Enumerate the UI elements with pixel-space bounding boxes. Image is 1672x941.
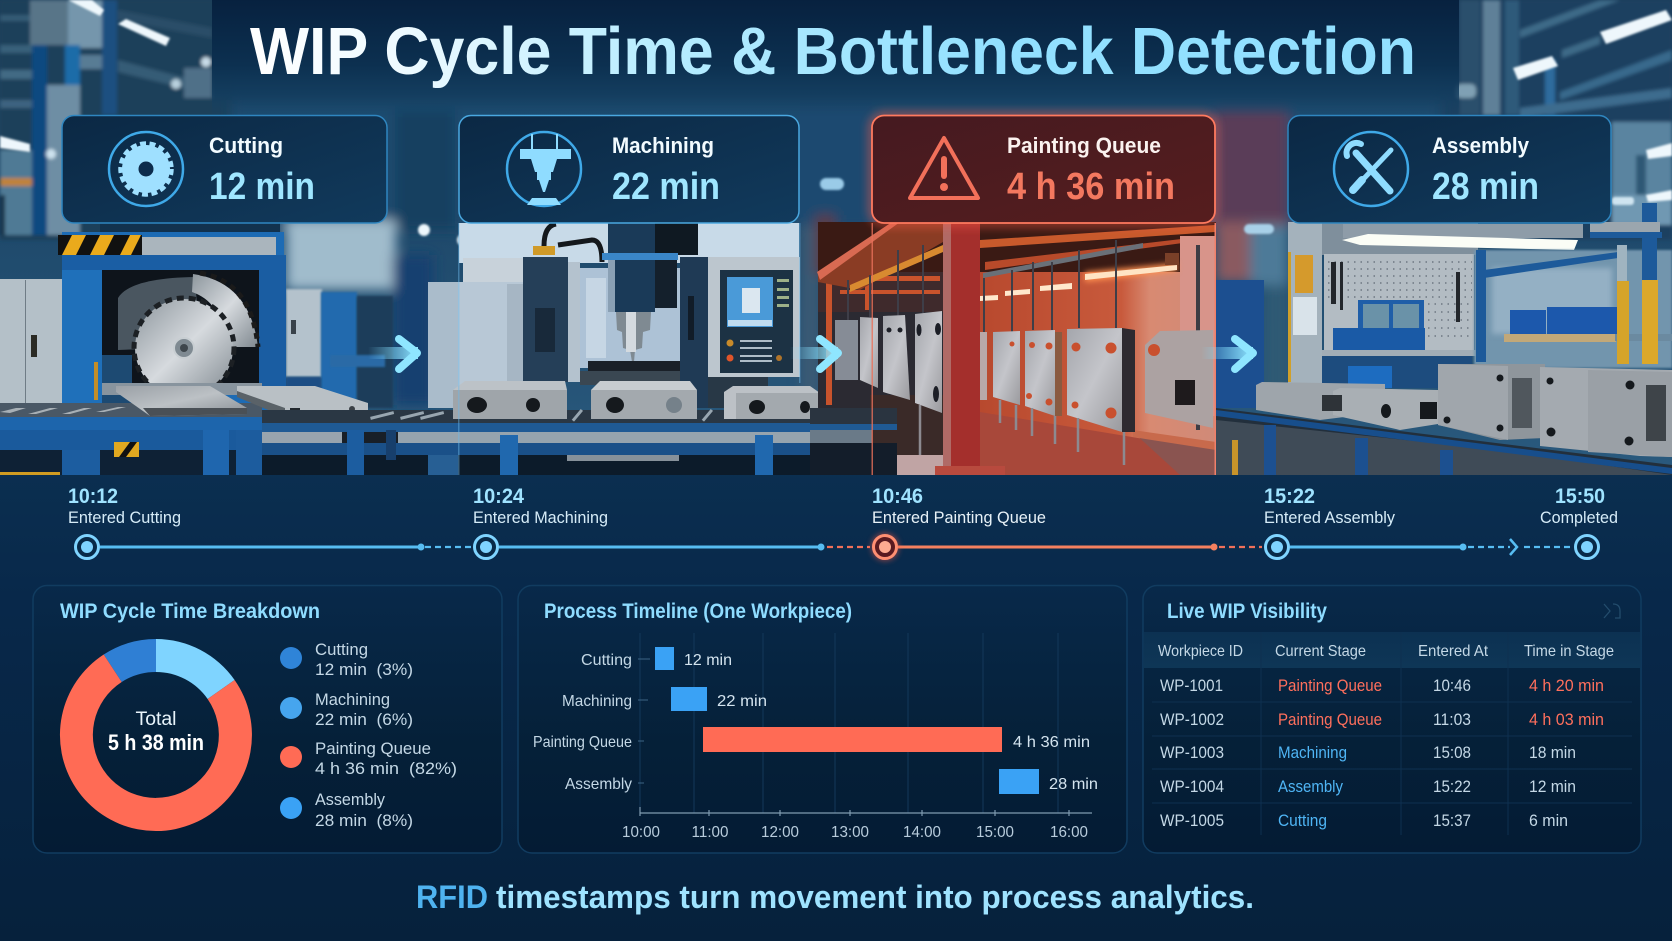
node: assembly	[1266, 536, 1288, 558]
legend: assembly: 28 min (8%)	[315, 811, 413, 830]
arrow: painting to assembly	[1201, 339, 1253, 369]
row: machining: Machining	[562, 693, 632, 710]
value: 4 h 36 min: 4 h 36 min	[1007, 166, 1175, 208]
event: 10:46: Entered Painting Queue	[872, 508, 1046, 527]
row: WP-1004: 12 min	[1529, 777, 1576, 796]
event: 10:46	[872, 485, 1046, 527]
panel: live WIP visibility	[1143, 586, 1641, 853]
event: 15:50: 15:50	[1555, 485, 1605, 508]
axis tick labels: 16:00	[1050, 824, 1088, 841]
icon: wrench and screwdriver	[1334, 132, 1408, 206]
legend: cutting: 12 min (3%)	[315, 660, 413, 679]
row: WP-1003: WP-1003	[1160, 743, 1224, 762]
panel: process timeline	[518, 586, 1127, 853]
icon: milling spindle	[507, 132, 581, 206]
card: machining	[459, 116, 799, 223]
donut total: Total	[136, 709, 176, 730]
floor	[980, 412, 1180, 475]
title: WIP Cycle Time & Bottleneck Detection	[250, 14, 1416, 89]
row: WP-1004: WP-1004	[1160, 777, 1224, 796]
column	[950, 223, 980, 473]
legend: machining: 22 min (6%)	[315, 710, 413, 729]
main conveyor	[262, 409, 810, 475]
table header	[1158, 643, 1614, 660]
axis tick labels: 10:00	[622, 824, 660, 841]
row: painting queue: 4 h 36 min	[1013, 734, 1090, 751]
panel: cycle time breakdown	[33, 586, 502, 853]
factory photo strip	[0, 0, 1672, 475]
row: WP-1003: Machining	[1278, 743, 1347, 762]
legend: assembly: Assembly	[315, 790, 385, 809]
legend: cutting	[280, 640, 413, 679]
node: cutting	[76, 536, 98, 558]
row: WP-1005: 15:37	[1433, 811, 1471, 830]
row: cutting: 12 min	[684, 652, 732, 669]
axis tick labels: 15:00	[976, 824, 1014, 841]
plates	[835, 320, 858, 380]
table header: Time in Stage	[1524, 643, 1614, 660]
event: 10:24: 10:24	[473, 485, 524, 508]
machining frame edges	[458, 223, 800, 475]
row: WP-1003: 18 min	[1529, 743, 1576, 762]
row: WP-1001: 10:46	[1433, 676, 1471, 695]
event: 15:22: 15:22	[1264, 485, 1315, 508]
heading: WIP Cycle Time Breakdown	[60, 600, 320, 623]
row: WP-1002: Painting Queue	[1278, 710, 1382, 729]
event: 10:12: Entered Cutting	[68, 508, 181, 527]
row: WP-1002	[1160, 710, 1604, 729]
event: 10:24: Entered Machining	[473, 508, 608, 527]
event: 10:12	[68, 485, 181, 527]
axis tick labels	[622, 824, 1088, 841]
event: 10:24	[473, 485, 608, 527]
row: WP-1001: Painting Queue	[1278, 676, 1382, 695]
card: assembly	[1288, 116, 1611, 223]
painting queue red section	[810, 222, 1216, 475]
row: WP-1004	[1160, 777, 1576, 796]
cutting conveyor	[0, 386, 368, 475]
icon: warning triangle	[910, 138, 978, 198]
blurred factory background: centre	[232, 100, 1440, 405]
gantt chart	[533, 633, 1098, 841]
caption: RFID	[416, 879, 488, 915]
label: assembly: Assembly	[1432, 133, 1530, 158]
row: WP-1005: WP-1005	[1160, 811, 1224, 830]
row: assembly: 28 min	[1049, 776, 1098, 793]
node: machining	[474, 536, 498, 558]
table header: Workpiece ID	[1158, 643, 1243, 660]
row: WP-1003	[1160, 743, 1576, 762]
caption: timestamps turn movement into process analytics.	[496, 879, 1254, 915]
legend: painting queue: 4 h 36 min (82%)	[315, 759, 457, 778]
machining station	[428, 223, 800, 408]
legend: painting queue: Painting Queue	[315, 739, 431, 758]
donut chart	[60, 639, 252, 831]
row: cutting	[581, 647, 732, 670]
label: painting queue: Painting Queue	[1007, 133, 1161, 158]
ceiling lights	[0, 0, 1672, 256]
row: WP-1002: WP-1002	[1160, 710, 1224, 729]
assembly conveyor	[1216, 408, 1672, 475]
cutting machine	[58, 222, 286, 412]
event: 15:22: Entered Assembly	[1264, 508, 1395, 527]
row: WP-1001: WP-1001	[1160, 676, 1223, 695]
node: painting queue	[871, 533, 899, 561]
row: WP-1005	[1160, 811, 1568, 830]
arrow: cutting to machining	[368, 339, 418, 369]
row: machining	[562, 687, 767, 711]
row: WP-1004: 15:22	[1433, 777, 1471, 796]
node: completed	[1576, 536, 1598, 558]
arrow: machining to painting	[790, 339, 838, 369]
card: painting queue (bottleneck)	[872, 116, 1215, 223]
row: WP-1001: 4 h 20 min	[1529, 676, 1604, 695]
row: WP-1002: 4 h 03 min	[1529, 710, 1604, 729]
row: painting queue: Painting Queue	[533, 734, 632, 751]
row: assembly	[565, 769, 1098, 794]
blurred factory background: right	[1440, 0, 1672, 240]
title band	[212, 0, 1459, 118]
row: painting queue	[533, 727, 1090, 752]
row: WP-1001	[1160, 676, 1604, 695]
value: 22 min: 22 min	[612, 166, 720, 208]
row: machining: 22 min	[717, 693, 767, 710]
blurred factory background: left	[0, 0, 232, 240]
row: WP-1003: 15:08	[1433, 743, 1471, 762]
legend: machining: Machining	[315, 690, 390, 709]
table header: Entered At	[1418, 643, 1489, 660]
row: cutting: Cutting	[581, 652, 632, 669]
assembly workpieces	[1256, 364, 1672, 457]
cutting station background cabinets	[0, 279, 393, 412]
label: cutting: Cutting	[209, 133, 283, 158]
axis tick labels: 11:00	[692, 824, 729, 841]
event: 15:50	[1540, 485, 1618, 527]
frame edge lines	[872, 223, 873, 475]
card: cutting	[62, 116, 387, 223]
assembly station	[1216, 203, 1672, 408]
event: 15:50: Completed	[1540, 508, 1618, 527]
value: 12 min: 12 min	[209, 166, 315, 208]
hanging plates	[848, 240, 1116, 332]
icon: faint expand glyph	[1604, 604, 1620, 618]
row: assembly: Assembly	[565, 776, 632, 793]
label: machining: Machining	[612, 133, 714, 158]
event: 15:22	[1264, 485, 1395, 527]
row: WP-1004: Assembly	[1278, 777, 1343, 796]
legend: painting queue	[280, 739, 457, 778]
heading: Live WIP Visibility	[1167, 600, 1327, 623]
value: 28 min: 28 min	[1432, 166, 1539, 208]
axis tick labels: 13:00	[831, 824, 869, 841]
legend: cutting: Cutting	[315, 640, 368, 659]
roller section left of paint	[810, 408, 897, 424]
table header: Current Stage	[1275, 643, 1366, 660]
legend: machining	[280, 690, 413, 729]
data table	[1144, 632, 1640, 835]
heading: Process Timeline (One Workpiece)	[544, 600, 852, 623]
machining workpieces	[453, 381, 820, 419]
timeline track	[100, 539, 1574, 555]
row: WP-1002: 11:03	[1433, 710, 1471, 729]
axis tick labels: 14:00	[903, 824, 941, 841]
row: WP-1005: 6 min	[1529, 811, 1568, 830]
event: 10:12: 10:12	[68, 485, 118, 508]
RFID event timeline	[68, 485, 1618, 561]
event: 10:46: 10:46	[872, 485, 923, 508]
donut total: 5 h 38 min	[108, 730, 204, 755]
axis tick labels: 12:00	[761, 824, 799, 841]
legend: assembly	[280, 790, 413, 830]
icon: saw blade	[109, 132, 183, 206]
donut total	[108, 709, 204, 755]
row: WP-1005: Cutting	[1278, 811, 1327, 830]
